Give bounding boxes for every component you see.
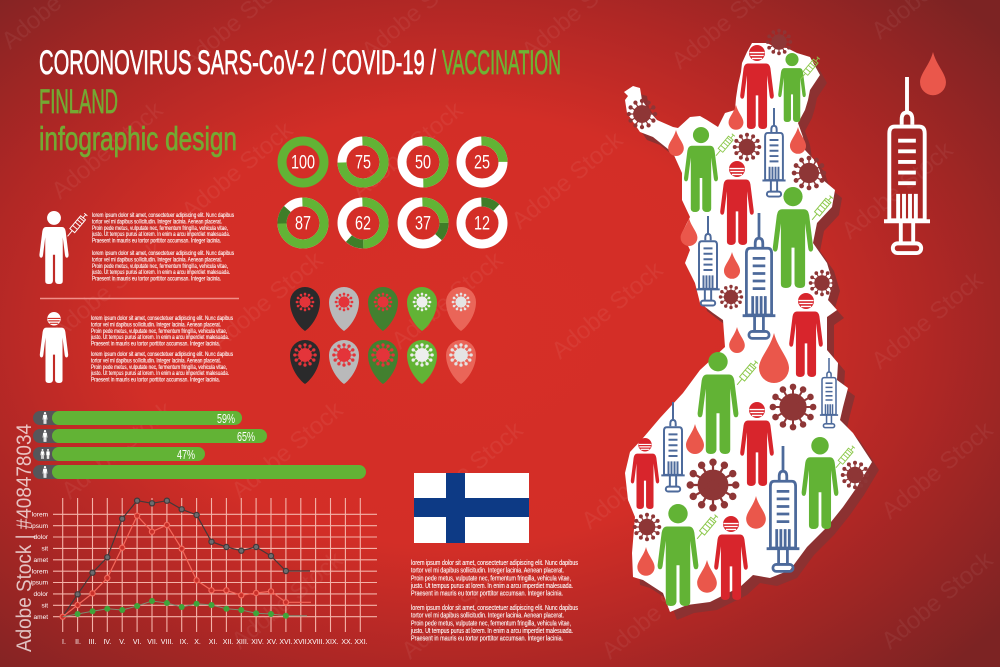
watermark pattern: Adobe Stock [347, 96, 469, 205]
icon: large syringe [884, 77, 930, 253]
map small syringes [695, 56, 856, 541]
title: VACCINATION [442, 44, 561, 82]
donut 87: 87 [295, 214, 311, 234]
line chart [31, 498, 377, 646]
title: FINLAND [39, 83, 118, 121]
watermark pattern: Adobe Stock [877, 546, 999, 655]
text block: under flag: lorem ipsum dolor sit amet, consectetuer adipiscing elit. Nunc dapibus [411, 603, 578, 612]
watermark pattern: Adobe Stock [227, 396, 349, 505]
text block: masked person: lorem ipsum dolor sit amet, consectetuer adipiscing elit. Nunc dapibus [91, 315, 233, 322]
text block: vaccinated person: lorem ipsum dolor sit amet, consectetuer adipiscing elit. Nunc dapibus [92, 250, 234, 257]
bar 47%: 47% [177, 447, 195, 462]
donut 25 [461, 141, 503, 183]
donut 37: 37 [415, 214, 431, 234]
watermark pattern: Adobe Stock [597, 556, 719, 665]
x axis labels: VIII. [161, 639, 173, 646]
map syringes [661, 108, 838, 571]
text block: vaccinated person: lorem ipsum dolor sit amet, consectetuer adipiscing elit. Nunc dapibus [92, 212, 234, 219]
title: CORONOVIRUS SARS-CoV-2 / COVID-19 / [39, 44, 436, 82]
text block: masked person: tortor vel mi dapibus sollicitudin. Integer lacinia. Aenean placerat. [91, 357, 221, 364]
x axis labels: IV. [103, 639, 111, 646]
donut 100 [282, 141, 324, 183]
series: green [63, 598, 307, 619]
x axis labels: I. [62, 639, 66, 646]
bar 59%: 59% [217, 411, 235, 426]
watermark pattern: Adobe Stock [207, 246, 329, 355]
text block: masked person: Praesent in mauris eu tortor porttitor accumsan. Integer lacinia. [91, 377, 220, 384]
x axis labels: XI. [209, 639, 217, 646]
map masked people [631, 45, 823, 600]
y axis labels: lorem [32, 512, 48, 518]
watermark pattern: Adobe Stock [507, 126, 629, 235]
text block: under flag: justo. Ut tempus purus at lorem. In enim a arcu imperdiet malesuada. [410, 626, 573, 635]
text block: vaccinated person: justo. Ut tempus purus at lorem. In enim a arcu imperdiet malesuada. [91, 269, 230, 276]
bar 65% [33, 429, 267, 444]
watermark pattern: Adobe Stock [407, 416, 529, 525]
map drops [637, 105, 806, 593]
text block: under flag [410, 558, 578, 643]
map vaccinated people [658, 53, 838, 606]
text block: under flag: lorem ipsum dolor sit amet, consectetuer adipiscing elit. Nunc dapibus [411, 558, 578, 567]
x axis labels: XX. [341, 639, 353, 646]
bar 59% [33, 411, 242, 426]
map viruses [627, 29, 869, 541]
map pins [290, 287, 476, 384]
x axis labels: XVI. [279, 639, 293, 646]
watermark pattern: Adobe Stock [547, 256, 669, 365]
text block: under flag: Proin pede metus, vulputate nec, fermentum fringilla, vehicula vitae, [411, 573, 571, 582]
watermark pattern: Adobe Stock [397, 556, 519, 665]
donut charts [282, 141, 503, 244]
x axis labels: IX. [180, 639, 188, 646]
bar full [33, 465, 366, 479]
flag of Finland [414, 473, 529, 543]
x axis labels: VII. [147, 639, 158, 646]
y axis labels: lorem [32, 568, 48, 575]
donut 12 [461, 202, 503, 244]
donut 87 [282, 202, 324, 244]
donut 75 [342, 141, 384, 183]
text block: under flag: Praesent in mauris eu tortor porttitor accumsan. Integer lacinia. [411, 634, 563, 643]
x axis labels: XVII. [293, 639, 309, 646]
watermark pattern: Adobe Stock [877, 416, 999, 525]
watermark pattern: Adobe Stock [177, 116, 299, 225]
x axis labels: V. [119, 639, 125, 646]
watermark pattern: Adobe Stock [57, 396, 179, 505]
x axis labels: XIV. [251, 639, 264, 646]
text block: masked person: Proin pede metus, vulputate nec, fermentum fringilla, vehicula vitae, [91, 328, 227, 335]
text block: vaccinated person: justo. Ut tempus purus at lorem. In enim a arcu imperdiet malesuada. [91, 231, 230, 238]
donut 50: 50 [415, 152, 431, 174]
x axis labels: X. [194, 639, 201, 646]
text block: vaccinated person: Proin pede metus, vulputate nec, fermentum fringilla, vehicula vitae, [92, 225, 228, 232]
stock id side text: Adobe Stock | #408478034 [13, 424, 36, 652]
text block: vaccinated person: tortor vel mi dapibus sollicitudin. Integer lacinia. Aenean placerat. [92, 218, 222, 225]
bar 47% [33, 447, 205, 462]
text block: under flag: justo. Ut tempus purus at lorem. In enim a arcu imperdiet malesuada. [410, 581, 573, 590]
x axis labels: XXI. [354, 639, 368, 646]
text block: vaccinated person: Praesent in mauris eu tortor porttitor accumsan. Integer lacinia. [92, 276, 221, 283]
pin row 1 [290, 287, 476, 331]
map land [624, 43, 872, 612]
x axis labels [62, 639, 368, 646]
series: dark [63, 498, 310, 617]
pin row 2 [290, 340, 476, 384]
donut 100: 100 [291, 152, 315, 174]
y axis labels: dolor [34, 591, 49, 598]
x axis labels: XV. [267, 639, 277, 646]
text block: masked person: justo. Ut tempus purus at lorem. In enim a arcu imperdiet malesuada. [90, 370, 229, 377]
title: infographic design [39, 120, 237, 157]
x axis labels: XIII. [236, 639, 249, 646]
donut 25: 25 [474, 152, 490, 174]
x axis labels: VI. [133, 639, 141, 646]
y axis labels: sit [42, 546, 48, 553]
x axis labels: XVIII. [307, 639, 325, 646]
map of Finland [624, 29, 879, 620]
watermark pattern: Adobe Stock [387, 246, 509, 355]
text block: under flag: Proin pede metus, vulputate nec, fermentum fringilla, vehicula vitae, [411, 618, 571, 627]
y axis labels: amet [34, 557, 48, 564]
icon: vaccinated person [39, 211, 88, 284]
y axis labels: ipsum [31, 580, 48, 587]
title [39, 44, 561, 157]
text block: masked person: justo. Ut tempus purus at lorem. In enim a arcu imperdiet malesuada. [90, 334, 229, 341]
map shadow [631, 51, 879, 620]
watermark pattern: Adobe Stock [47, 236, 169, 345]
text block: masked person: lorem ipsum dolor sit amet, consectetuer adipiscing elit. Nunc dapibus [91, 351, 233, 358]
text block: masked person [90, 315, 233, 384]
text block: under flag: tortor vel mi dapibus sollicitudin. Integer lacinia. Aenean placerat. [411, 611, 564, 620]
y axis labels: sit [42, 602, 48, 610]
bar 65%: 65% [237, 429, 255, 444]
text block: vaccinated person: Proin pede metus, vulputate nec, fermentum fringilla, vehicula vitae, [92, 263, 228, 270]
x axis labels: III. [89, 639, 96, 646]
progress bars [33, 411, 366, 479]
series: red [60, 513, 311, 619]
watermark pattern: Adobe Stock [837, 136, 959, 245]
donut 62 [342, 202, 384, 244]
y axis labels: dolor [34, 534, 49, 541]
donut 37 [402, 202, 444, 244]
text block: masked person: tortor vel mi dapibus sollicitudin. Integer lacinia. Aenean placerat. [91, 321, 221, 328]
text block: vaccinated person [91, 212, 234, 283]
watermark pattern: Adobe Stock [47, 96, 169, 205]
text block: under flag: Praesent in mauris eu tortor porttitor accumsan. Integer lacinia. [411, 589, 563, 598]
donut 62: 62 [355, 214, 371, 234]
y axis labels: ipsum [31, 523, 48, 530]
watermark pattern: Adobe Stock [227, 546, 349, 655]
text block: masked person: Proin pede metus, vulputate nec, fermentum fringilla, vehicula vitae, [91, 364, 227, 371]
icon: large drop [920, 52, 946, 95]
donut 75: 75 [355, 152, 371, 174]
x axis labels: XII. [223, 639, 233, 646]
x axis labels: II. [75, 639, 81, 646]
icon: masked person [40, 312, 68, 383]
y axis labels: amet [34, 614, 48, 621]
text block: vaccinated person: tortor vel mi dapibus sollicitudin. Integer lacinia. Aenean placerat. [92, 256, 222, 263]
text block: vaccinated person: Praesent in mauris eu tortor porttitor accumsan. Integer lacinia. [92, 238, 221, 245]
donut 12: 12 [474, 214, 490, 234]
donut 50 [402, 141, 444, 183]
y axis labels [31, 512, 49, 621]
text block: masked person: Praesent in mauris eu tortor porttitor accumsan. Integer lacinia. [91, 341, 220, 348]
text block: under flag: tortor vel mi dapibus sollicitudin. Integer lacinia. Aenean placerat. [411, 566, 564, 575]
watermark pattern: Adobe Stock [577, 426, 699, 535]
x axis labels: XIX. [325, 639, 339, 646]
watermark pattern: Adobe Stock [867, 266, 989, 375]
